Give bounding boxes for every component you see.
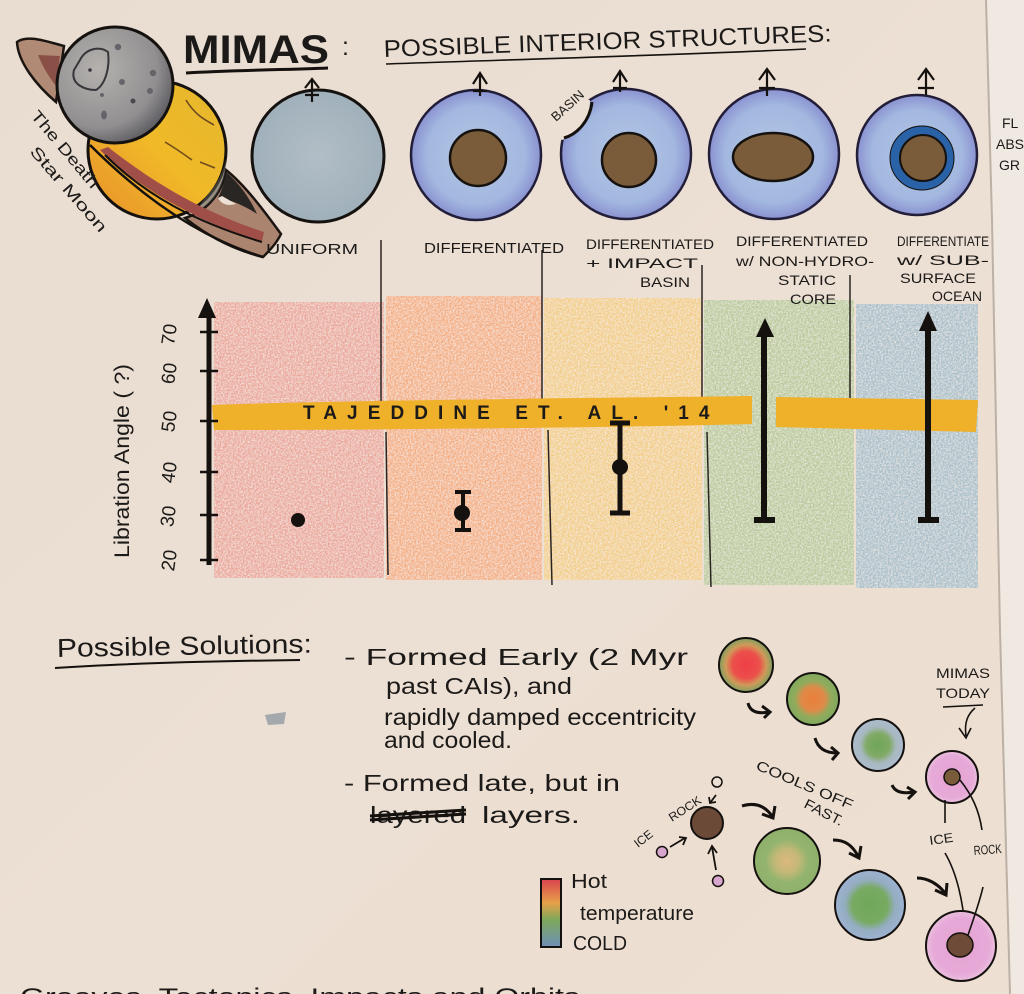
label: Mimas today: TODAY xyxy=(936,685,991,701)
solution text: formed late: layers. xyxy=(482,802,580,828)
temperature legend: Hot xyxy=(571,871,608,893)
column labels: w/ NON-HYDRO- xyxy=(735,253,874,269)
y axis: 20 xyxy=(158,549,182,572)
label: cools off fast: COOLS OFF xyxy=(754,757,856,812)
caption: The Death Star Moon xyxy=(26,108,110,236)
illustration: Saturn and Mimas xyxy=(17,27,281,257)
heading: possible interior structures: : xyxy=(342,33,349,61)
column labels: STATIC xyxy=(778,272,836,288)
heading: possible solutions: Possible Solutions: xyxy=(57,629,312,663)
solution text: formed early: past CAIs), and xyxy=(386,673,572,699)
interior model: subsurface ocean xyxy=(857,69,977,215)
title: MIMAS: MIMAS xyxy=(183,28,329,72)
solution text: formed late: layered xyxy=(370,802,466,828)
column labels: + IMPACT xyxy=(586,255,699,271)
column labels: OCEAN xyxy=(932,288,982,304)
Mimas moon xyxy=(57,27,173,143)
column labels: CORE xyxy=(790,291,836,307)
y axis: 50 xyxy=(158,410,182,433)
label: cools off fast: FAST. xyxy=(802,795,846,829)
cut-off margin text: FL xyxy=(1002,115,1019,131)
labels: ice and rock on today's structure xyxy=(928,780,1002,935)
temperature legend: temperature xyxy=(580,903,694,925)
column labels: DIFFERENTIATED xyxy=(424,240,564,257)
evolution sequence: hot to cold upper track xyxy=(719,638,978,803)
labels: ice and rock on today's structure: ROCK xyxy=(973,841,1002,858)
solution text: formed late: - Formed late, but in xyxy=(344,770,620,796)
caption: The Death Star Moon: Star Moon xyxy=(26,143,110,236)
Saturn ring left part xyxy=(17,39,64,102)
column labels: SURFACE xyxy=(900,270,976,286)
accretion diagram: ice and rock: ICE xyxy=(631,827,656,850)
data: uniform xyxy=(291,513,305,527)
interior model: differentiated xyxy=(411,73,541,220)
solution text: formed late xyxy=(344,770,620,828)
Tajeddine measurement band: TAJEDDINE ET. AL. '14 xyxy=(303,403,713,424)
interior model: differentiated + impact basin: BASIN xyxy=(548,87,587,124)
interior model: uniform xyxy=(252,79,384,222)
y axis: 40 xyxy=(158,461,182,484)
small grey mark xyxy=(265,712,286,725)
temperature legend xyxy=(541,871,694,955)
interior model: non-hydrostatic core xyxy=(709,69,839,219)
column labels xyxy=(266,233,990,307)
interior model: differentiated + impact basin xyxy=(548,71,691,219)
column labels: UNIFORM xyxy=(266,241,358,258)
solution text: formed early xyxy=(344,644,697,753)
y axis: Libration Angle ( ?) xyxy=(111,364,134,558)
data: non-hydrostatic core range xyxy=(754,318,775,520)
data: subsurface ocean range xyxy=(918,311,939,520)
cut-off margin text: ABS xyxy=(996,136,1024,152)
y axis: 30 xyxy=(157,504,181,528)
label: Mimas today: MIMAS xyxy=(936,665,990,681)
chart columns: pencil shaded bands xyxy=(214,296,978,588)
temperature legend: COLD xyxy=(573,933,627,955)
y axis: 70 xyxy=(158,323,182,346)
accretion diagram: ice and rock xyxy=(631,777,724,886)
Saturn body xyxy=(88,81,226,219)
y axis: 60 xyxy=(158,362,182,385)
Tajeddine measurement band xyxy=(212,396,978,432)
cut-off margin text: GR xyxy=(999,157,1020,173)
column dividers xyxy=(381,240,850,587)
data: differentiated xyxy=(454,492,471,530)
column labels: DIFFERENTIATE xyxy=(897,233,989,249)
label: cools off fast xyxy=(754,757,856,829)
Saturn ring right part xyxy=(185,170,281,257)
evolution sequence: lower track xyxy=(754,828,996,981)
Saturn ring front xyxy=(100,147,264,241)
y axis xyxy=(111,298,218,572)
column labels: w/ SUB- xyxy=(895,252,990,268)
solution text: formed early: and cooled. xyxy=(384,727,512,753)
solution text: formed early: rapidly damped eccentricity xyxy=(384,704,697,730)
caption: The Death Star Moon: The Death xyxy=(27,108,102,192)
labels: ice and rock on today's structure: ICE xyxy=(928,830,955,848)
column labels: BASIN xyxy=(640,274,690,290)
heading: possible interior structures: POSSIBLE INTERIOR STRUCTURES: xyxy=(383,20,832,63)
column labels: DIFFERENTIATED xyxy=(586,236,714,252)
column labels: DIFFERENTIATED xyxy=(736,233,868,249)
lower track arrows xyxy=(742,804,947,895)
accretion diagram: ice and rock: ROCK xyxy=(666,793,704,825)
solution text: formed early: - Formed Early (2 Myr xyxy=(344,644,689,670)
cut-off margin text xyxy=(996,115,1024,173)
data: differentiated + impact basin xyxy=(610,423,630,513)
upper track arrows xyxy=(748,703,915,799)
label: Mimas today xyxy=(936,665,991,738)
